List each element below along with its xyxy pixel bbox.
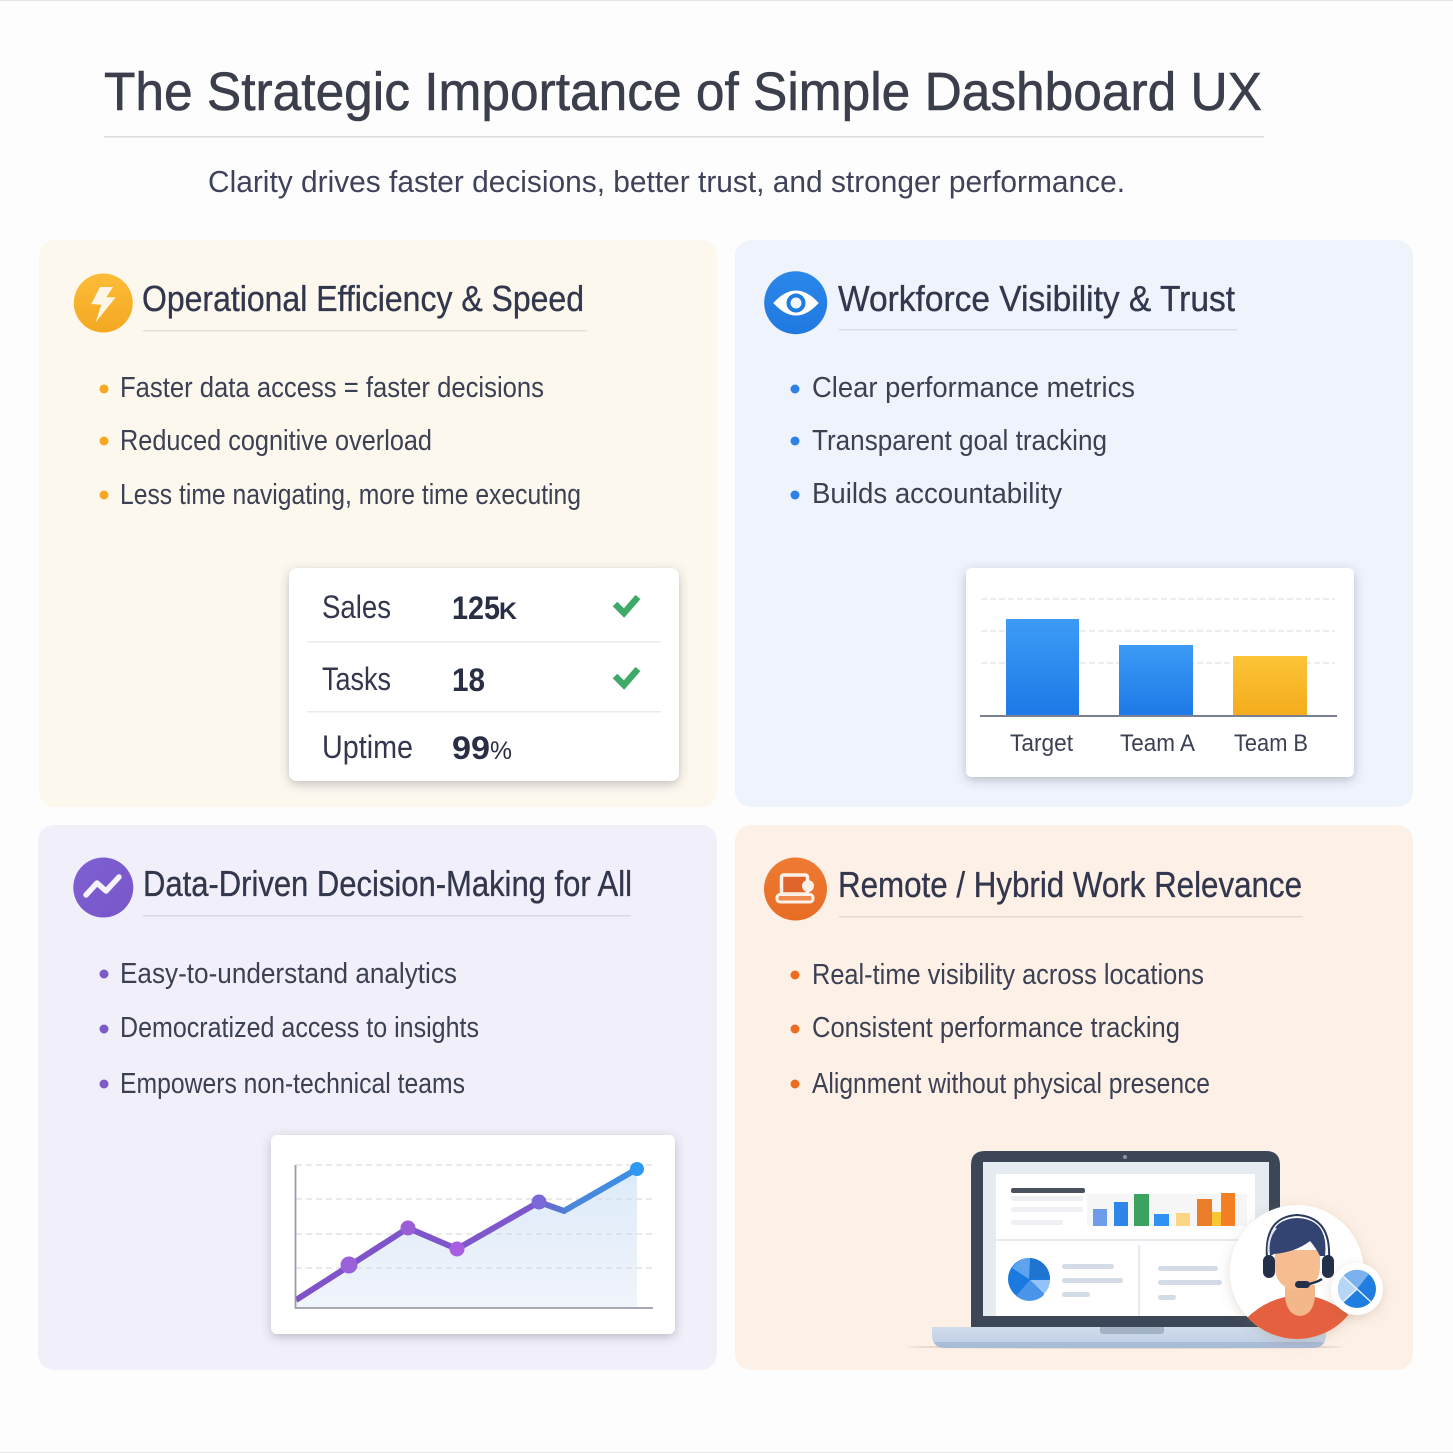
bullet list: [100, 958, 479, 1100]
title: The Strategic Importance of Simple Dashboard UX: [104, 62, 1262, 122]
bullet list: Empowers non-technical teams: [120, 1068, 465, 1100]
bullet list: [790, 372, 1135, 510]
bullet list: Easy-to-understand analytics: [120, 958, 457, 990]
bar chart card: Team B: [1234, 730, 1308, 757]
icon: trend line: [73, 858, 133, 918]
heading: workforce visibility: Workforce Visibility & Trust: [838, 278, 1235, 319]
bullet list: Democratized access to insights: [120, 1012, 479, 1044]
bullet list: Reduced cognitive overload: [120, 425, 432, 457]
panel: operational efficiency: [39, 240, 717, 807]
icon: eye: [764, 271, 827, 334]
illustration: laptop with dashboard: [907, 1151, 1343, 1349]
metrics card: Uptime: [322, 729, 413, 765]
icon: check: [615, 669, 638, 685]
bullet list: Clear performance metrics: [812, 372, 1135, 404]
icon: lightning bolt: [74, 274, 133, 332]
subtitle: Clarity drives faster decisions, better trust, and stronger performance.: [208, 164, 1125, 199]
bullet list: [100, 372, 581, 511]
panel: remote hybrid work: [735, 825, 1413, 1370]
bullet list: Alignment without physical presence: [812, 1068, 1210, 1100]
panel: data-driven decisions: [38, 825, 717, 1370]
bullet list: Transparent goal tracking: [812, 425, 1107, 457]
panel: workforce visibility: [735, 240, 1413, 807]
bullet list: Builds accountability: [812, 478, 1062, 510]
bullet list: Less time navigating, more time executing: [120, 479, 581, 511]
bullet list: Faster data access = faster decisions: [120, 372, 544, 404]
metrics card: Sales: [322, 589, 391, 625]
metrics card: 99: [452, 730, 490, 766]
heading: operational efficiency: Operational Efficiency & Speed: [142, 278, 584, 319]
illustration: person with headset: [1230, 1205, 1383, 1345]
bar chart card: [966, 568, 1354, 777]
metrics card: K: [499, 598, 518, 625]
heading: data-driven decisions: Data-Driven Decision-Making for All: [143, 863, 632, 904]
metrics card: %: [490, 737, 512, 765]
icon: laptop: [764, 858, 827, 920]
bullet list: Consistent performance tracking: [812, 1012, 1180, 1044]
metrics card: 18: [452, 662, 485, 698]
bullet list: [790, 959, 1210, 1100]
bar chart card: Team A: [1120, 730, 1195, 757]
line chart card: [271, 1135, 675, 1334]
icon: pie badge: [1331, 1263, 1383, 1315]
bar chart card: Target: [1010, 730, 1073, 757]
bullet list: Real-time visibility across locations: [812, 959, 1204, 991]
metrics card: 125: [452, 590, 500, 626]
heading: remote hybrid work: Remote / Hybrid Work Relevance: [838, 864, 1302, 905]
metrics card: [289, 568, 679, 781]
metrics card: Tasks: [322, 661, 391, 697]
icon: check: [615, 597, 638, 613]
